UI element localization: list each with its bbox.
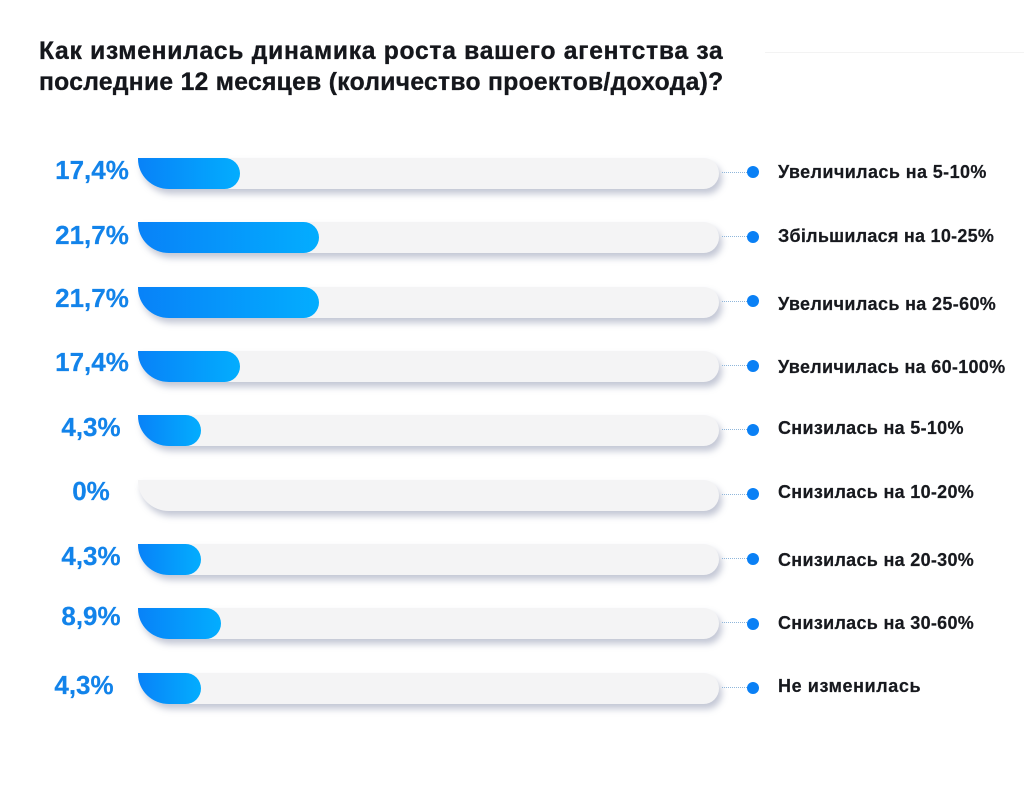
bar row: 0% Снизилась на 10-20%: Снизилась на 10-20% (778, 482, 974, 502)
bar row: 4,3% Снизилась на 5-10%: Снизилась на 5-10% (778, 418, 964, 438)
bar row: 4,3% Снизилась на 20-30% (61, 541, 974, 584)
bar row: 4,3% Не изменилась: 4,3% (54, 670, 114, 700)
bar row: 21,7% Увеличилась на 25-60% (55, 283, 996, 326)
bar row: 21,7% Збільшилася на 10-25%: 21,7% (55, 220, 129, 250)
bar row: 21,7% Увеличилась на 25-60%: Увеличилась на 25-60% (778, 294, 996, 314)
bar row: 0% Снизилась на 10-20%: 0% (72, 476, 110, 506)
title: последние 12 месяцев (количество проектов/дохода)? (39, 69, 724, 96)
bar row: 8,9% Снизилась на 30-60% (61, 601, 974, 648)
title (39, 38, 724, 96)
bar row: 4,3% Снизилась на 20-30%: Снизилась на 20-30% (778, 550, 974, 570)
bar row: 4,3% Снизилась на 20-30%: 4,3% (61, 541, 121, 571)
bar row: 17,4% Увеличилась на 5-10%: 17,4% (55, 155, 129, 185)
bar row: 17,4% Увеличилась на 60-100% (55, 347, 1005, 390)
bar row: 21,7% Увеличилась на 25-60%: 21,7% (55, 283, 129, 313)
bar row: 4,3% Не изменилась (54, 670, 921, 712)
bar row: 4,3% Снизилась на 5-10% (61, 412, 964, 454)
bar row: 4,3% Снизилась на 5-10%: 4,3% (61, 412, 121, 442)
bar row: 17,4% Увеличилась на 5-10%: Увеличилась на 5-10% (778, 162, 987, 182)
bar row: 4,3% Не изменилась: Не изменилась (778, 676, 921, 696)
bar row: 17,4% Увеличилась на 60-100%: Увеличилась на 60-100% (778, 357, 1005, 377)
bar row: 21,7% Збільшилася на 10-25% (55, 220, 994, 262)
bar row: 17,4% Увеличилась на 60-100%: 17,4% (55, 347, 129, 377)
title: Как изменилась динамика роста вашего агентства за (39, 38, 723, 65)
bar row: 8,9% Снизилась на 30-60%: 8,9% (61, 601, 121, 631)
bar row: 17,4% Увеличилась на 5-10% (55, 155, 987, 198)
bar row: 8,9% Снизилась на 30-60%: Снизилась на 30-60% (778, 613, 974, 633)
bar row: 21,7% Збільшилася на 10-25%: Збільшилася на 10-25% (778, 226, 994, 246)
bar row: 0% Снизилась на 10-20% (72, 476, 974, 520)
